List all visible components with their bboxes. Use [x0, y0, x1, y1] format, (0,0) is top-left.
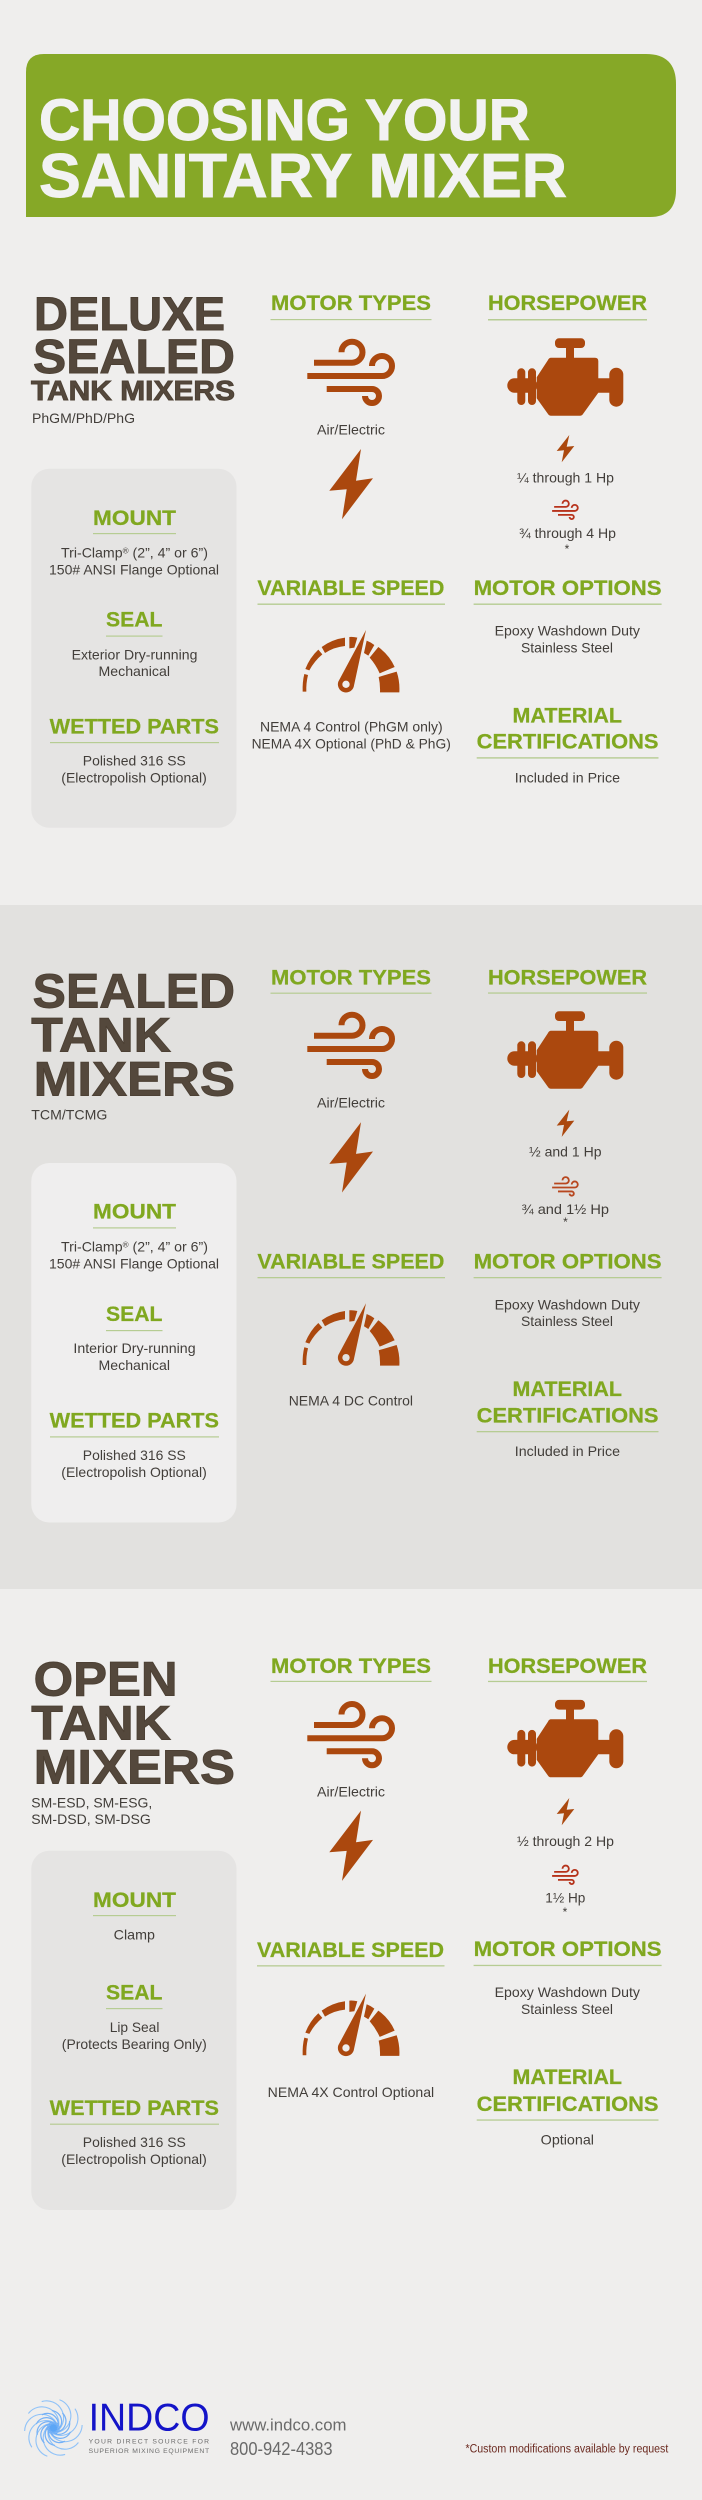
text: certifications details: Optional — [541, 2132, 594, 2148]
title line 1: CHOOSING YOUR — [39, 88, 530, 153]
text: mount details — [49, 1239, 219, 1271]
text: certifications details: Included in Price — [515, 1443, 620, 1459]
text: wetted parts details — [61, 1447, 207, 1480]
icon: small lightning bolt — [557, 1798, 574, 1825]
heading: material certifications — [477, 1377, 658, 1428]
heading: material certifications: CERTIFICATIONS — [477, 2092, 658, 2116]
text: electric horsepower: ½ and 1 Hp — [529, 1144, 602, 1160]
section background: sealed tank mixers — [0, 905, 702, 1589]
icon: wind — [307, 1704, 392, 1765]
icon: indco swirl logo — [21, 2396, 86, 2460]
heading: material certifications: CERTIFICATIONS — [477, 729, 658, 753]
text: seal details — [62, 2019, 207, 2052]
text: variable speed details: NEMA 4X Optional (PhD & PhG) — [252, 735, 451, 751]
text: motor options details: Epoxy Washdown Duty — [495, 1984, 640, 2000]
text: variable speed details: NEMA 4 DC Control — [289, 1392, 413, 1408]
text: electric horsepower: ½ through 2 Hp — [517, 1833, 614, 1849]
text: seal details — [73, 1340, 196, 1373]
text: wetted parts details: Polished 316 SS — [83, 753, 186, 769]
heading: horsepower: HORSEPOWER — [488, 291, 647, 315]
heading: material certifications: MATERIAL — [512, 703, 622, 727]
text: mount details: ® — [123, 546, 129, 555]
heading: sealed tank mixers — [31, 964, 235, 1106]
panel: mount, seal, wetted parts — [31, 1851, 236, 2210]
text: air/electric: Air/Electric — [317, 421, 385, 437]
text: mount details — [49, 544, 219, 577]
text: motor options details — [495, 1297, 640, 1329]
text: variable speed details: NEMA 4X Control Optional — [268, 2084, 434, 2100]
text: motor options details: Epoxy Washdown Duty — [495, 1297, 640, 1313]
model numbers — [31, 1794, 152, 1827]
heading: material certifications: MATERIAL — [512, 2065, 622, 2089]
text: air horsepower: ¾ through 4 Hp — [519, 525, 616, 541]
heading: open tank mixers: MIXERS — [34, 1740, 235, 1794]
logo tagline — [89, 2439, 209, 2455]
heading: motor options: MOTOR OPTIONS — [474, 1937, 662, 1961]
heading: sealed tank mixers: MIXERS — [34, 1052, 235, 1106]
text: wetted parts details: (Electropolish Optional) — [61, 2151, 207, 2167]
icon: small wind — [552, 1866, 578, 1884]
footnote: *Custom modifications available by request — [466, 2443, 669, 2455]
text: seal details: Interior Dry-running — [73, 1340, 196, 1356]
icon: small lightning bolt — [557, 1110, 574, 1137]
text: wetted parts details — [61, 753, 207, 786]
text: motor options details: Stainless Steel — [521, 2001, 613, 2017]
heading: seal: SEAL — [106, 1302, 162, 1326]
text: mount details: 150# ANSI Flange Optional — [49, 561, 219, 577]
heading: sealed tank mixers: SEALED — [33, 964, 235, 1018]
heading: mount: MOUNT — [93, 1200, 176, 1224]
text: air horsepower: 1½ Hp — [545, 1889, 586, 1905]
text: mount details: 150# ANSI Flange Optional — [49, 1255, 219, 1271]
heading: mount: MOUNT — [93, 506, 176, 530]
text: mount details: (2”, 4” or 6”) — [129, 544, 208, 560]
logo tagline: SUPERIOR MIXING EQUIPMENT — [89, 2448, 209, 2455]
heading: material certifications — [477, 2065, 658, 2116]
text: seal details: Mechanical — [98, 663, 170, 679]
heading: open tank mixers: TANK — [31, 1696, 171, 1750]
heading: open tank mixers — [31, 1652, 235, 1794]
text: wetted parts details — [61, 2134, 207, 2167]
text: air horsepower: ¾ and 1½ Hp — [522, 1201, 609, 1217]
heading: open tank mixers: OPEN — [34, 1652, 178, 1706]
icon: wind — [307, 342, 392, 403]
icon: engine — [507, 1011, 623, 1089]
icon: speedometer — [303, 1303, 399, 1366]
text: motor options details — [495, 623, 640, 655]
heading: sealed tank mixers: TANK — [31, 1008, 171, 1062]
text: wetted parts details: (Electropolish Optional) — [61, 1464, 207, 1480]
text: motor options details — [495, 1984, 640, 2017]
heading: deluxe sealed tank mixers: TANK MIXERS — [31, 375, 235, 406]
text: mount details: ® — [123, 1241, 129, 1250]
heading: motor options: MOTOR OPTIONS — [474, 1249, 662, 1273]
text: seal details: Lip Seal — [110, 2019, 159, 2035]
footer — [21, 2396, 669, 2460]
text: motor options details: Epoxy Washdown Duty — [495, 623, 640, 639]
text: motor options details: Stainless Steel — [521, 1313, 613, 1329]
logo tagline: YOUR DIRECT SOURCE FOR — [89, 2439, 209, 2446]
model numbers: TCM/TCMG — [31, 1106, 107, 1122]
heading: wetted parts: WETTED PARTS — [50, 714, 219, 738]
heading: horsepower: HORSEPOWER — [488, 965, 647, 989]
section: sealed tank mixers — [31, 964, 662, 1522]
footnote asterisk: * — [563, 1905, 568, 1919]
text: wetted parts details: Polished 316 SS — [83, 1447, 186, 1463]
text: mount details: Clamp — [114, 1927, 155, 1943]
text: motor options details: Stainless Steel — [521, 639, 613, 655]
footnote asterisk: * — [565, 542, 570, 556]
title line 2: SANITARY MIXER — [39, 142, 567, 211]
text: certifications details: Included in Price — [515, 770, 620, 786]
heading: wetted parts: WETTED PARTS — [50, 1409, 219, 1433]
icon: lightning bolt — [329, 1122, 373, 1192]
heading: variable speed: VARIABLE SPEED — [257, 576, 444, 600]
heading: material certifications — [477, 703, 658, 753]
text: variable speed details — [252, 719, 451, 751]
heading: deluxe sealed tank mixers — [31, 287, 235, 406]
section: deluxe sealed tank mixers — [31, 287, 662, 828]
heading: seal: SEAL — [106, 1980, 162, 2004]
icon: speedometer — [303, 630, 399, 692]
heading: deluxe sealed tank mixers: DELUXE — [34, 287, 225, 340]
heading: wetted parts: WETTED PARTS — [50, 2096, 219, 2120]
website: www.indco.com — [229, 2416, 346, 2435]
icon: speedometer — [303, 1994, 399, 2056]
model numbers: SM-DSD, SM-DSG — [31, 1811, 151, 1827]
text: wetted parts details: Polished 316 SS — [83, 2134, 186, 2150]
text: wetted parts details: (Electropolish Optional) — [61, 770, 207, 786]
model numbers: SM-ESD, SM-ESG, — [31, 1794, 152, 1810]
heading: material certifications: CERTIFICATIONS — [477, 1404, 658, 1428]
panel: mount, seal, wetted parts — [31, 1163, 236, 1522]
text: air/electric: Air/Electric — [317, 1783, 385, 1799]
heading: deluxe sealed tank mixers: SEALED — [33, 330, 235, 384]
banner: title — [26, 54, 676, 217]
phone number: 800-942-4383 — [230, 2439, 333, 2459]
heading: material certifications: MATERIAL — [512, 1377, 622, 1401]
logo wordmark: INDCO — [89, 2397, 210, 2440]
heading: motor types: MOTOR TYPES — [271, 1654, 431, 1678]
text: mount details: (2”, 4” or 6”) — [129, 1239, 208, 1255]
heading: horsepower: HORSEPOWER — [488, 1654, 647, 1678]
heading: seal: SEAL — [106, 608, 162, 632]
icon: small wind — [552, 501, 578, 519]
icon: engine — [507, 1700, 623, 1777]
heading: motor types: MOTOR TYPES — [271, 291, 431, 315]
icon: small wind — [552, 1177, 578, 1196]
heading: variable speed: VARIABLE SPEED — [257, 1938, 444, 1962]
text: seal details: Exterior Dry-running — [72, 646, 197, 662]
model numbers: PhGM/PhD/PhG — [32, 410, 135, 426]
heading: mount: MOUNT — [93, 1888, 176, 1912]
icon: engine — [507, 338, 623, 416]
heading: motor types: MOTOR TYPES — [271, 965, 431, 989]
text: seal details — [72, 646, 197, 679]
text: seal details: Mechanical — [98, 1357, 170, 1373]
icon: lightning bolt — [329, 449, 373, 519]
text: electric horsepower: ¼ through 1 Hp — [517, 470, 614, 486]
icon: small lightning bolt — [557, 435, 574, 462]
text: mount details: Tri-Clamp — [61, 1239, 122, 1255]
heading: variable speed: VARIABLE SPEED — [257, 1249, 444, 1273]
section: open tank mixers — [31, 1652, 662, 2210]
text: air/electric: Air/Electric — [317, 1095, 385, 1111]
panel: mount, seal, wetted parts — [31, 469, 236, 828]
heading: motor options: MOTOR OPTIONS — [474, 576, 662, 600]
text: mount details: Tri-Clamp — [61, 544, 122, 560]
footnote asterisk: * — [563, 1215, 568, 1229]
text: variable speed details: NEMA 4 Control (PhGM only) — [260, 719, 443, 735]
text: seal details: (Protects Bearing Only) — [62, 2036, 207, 2052]
icon: lightning bolt — [329, 1811, 373, 1881]
icon: wind — [307, 1015, 392, 1076]
